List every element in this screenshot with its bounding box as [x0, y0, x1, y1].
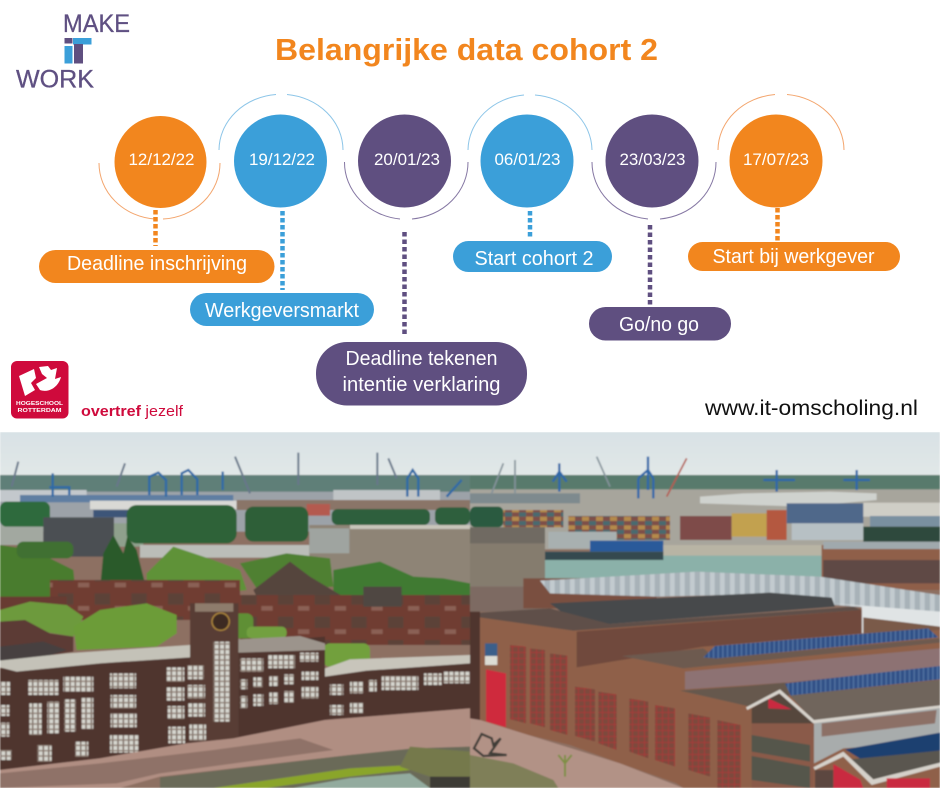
timeline item: 23/03/23: 23/03/23 — [620, 150, 686, 169]
sky — [0, 432, 940, 478]
callout: Start cohort 2 — [453, 241, 612, 272]
callout: Go/no go — [589, 307, 731, 340]
hall windows — [510, 645, 741, 788]
photo right half — [470, 457, 940, 788]
timeline item: 12/12/22: 12/12/22 — [128, 150, 194, 169]
callout: Werkgeversmarkt — [190, 293, 374, 326]
photo: aerial view of Rotterdam harbour and campus — [0, 432, 940, 788]
logo: Make IT Work: MAKE — [63, 10, 130, 38]
horizon and harbour — [0, 475, 470, 493]
website url: www.it-omscholing.nl — [704, 397, 918, 420]
photo left half — [0, 453, 470, 788]
front gable dark — [752, 692, 813, 737]
timeline item: 20/01/23: 20/01/23 — [374, 150, 440, 169]
plaza — [470, 718, 683, 788]
quay wall — [160, 747, 470, 788]
blue solar front — [785, 666, 940, 696]
timeline item: 19/12/22: 19/12/22 — [249, 150, 315, 169]
front trees — [0, 602, 83, 637]
title: Belangrijke data cohort 2 — [275, 32, 658, 67]
timeline item: 06/01/23 — [468, 95, 592, 237]
blue warehouse — [548, 532, 617, 548]
callout: Werkgeversmarkt: Werkgeversmarkt — [205, 300, 359, 322]
small tree — [558, 755, 572, 777]
low white buildings — [140, 545, 310, 558]
quay — [0, 708, 470, 788]
callout: Start bij werkgever — [688, 242, 900, 271]
parking — [470, 587, 545, 612]
sculpture — [474, 734, 507, 756]
cranes — [49, 470, 462, 497]
beige warehouse — [309, 525, 470, 585]
dark office — [43, 517, 114, 557]
red door — [486, 669, 506, 727]
white gable trim — [746, 689, 940, 723]
timeline item: 20/01/23 — [344, 114, 468, 336]
grey annex — [814, 707, 940, 763]
beige warehouse — [470, 542, 546, 586]
far trees — [0, 502, 50, 527]
pale roof — [833, 603, 940, 633]
dark sawtooth roof — [550, 593, 835, 624]
container stacks — [470, 507, 503, 527]
canal bank — [470, 755, 558, 788]
callout: Go/no go: Go/no go — [619, 314, 699, 336]
sign — [485, 643, 497, 656]
callout: Deadline tekenen intentie verklaring: Deadline tekenen — [346, 348, 498, 370]
timeline item: 19/12/22 — [219, 94, 343, 290]
windows — [0, 653, 470, 762]
quay and water — [545, 552, 822, 578]
callout: Start cohort 2: Start cohort 2 — [474, 248, 594, 270]
main hall walls — [480, 608, 940, 788]
timeline item: 23/03/23 — [592, 114, 716, 306]
logo: Hogeschool Rotterdam: ROTTERDAM — [18, 408, 62, 414]
timeline item: 17/07/23 — [718, 94, 844, 242]
house rows — [50, 580, 240, 620]
logo: Make IT Work: WORK — [16, 66, 94, 94]
middle green trees — [0, 545, 75, 600]
tagline: overtref jezelf: overtref jezelf — [81, 403, 184, 420]
logo: Make IT Work — [16, 10, 130, 94]
blue lower roof — [845, 733, 940, 761]
timeline item: 12/12/22 — [99, 116, 220, 246]
callout: Deadline inschrijving — [39, 250, 274, 283]
logo: Hogeschool Rotterdam: HOGESCHOOL — [16, 401, 64, 407]
cranes — [553, 457, 870, 498]
corrugated roof — [790, 680, 940, 721]
callout: Start bij werkgever: Start bij werkgever — [712, 246, 875, 268]
top right brick — [822, 545, 940, 590]
clock tower — [190, 603, 238, 740]
building mass — [0, 636, 471, 770]
callout: Deadline tekenen intentie verklaring: intentie verklaring — [342, 374, 500, 396]
horizon and harbour — [468, 474, 940, 490]
glazing band — [685, 648, 940, 689]
roof strips — [0, 645, 190, 672]
houses far left — [0, 619, 74, 655]
logo: Hogeschool Rotterdam — [11, 361, 68, 418]
middle hall roof — [622, 638, 940, 668]
solar roof hall — [523, 578, 657, 608]
callout: Deadline tekenen intentie verklaring — [316, 342, 527, 406]
callout: Deadline inschrijving: Deadline inschrijving — [67, 253, 247, 275]
gable lower wall — [752, 723, 813, 788]
timeline item: 17/07/23: 17/07/23 — [743, 150, 809, 169]
timeline item: 06/01/23: 06/01/23 — [494, 150, 560, 169]
small roof — [680, 683, 790, 707]
photo base — [0, 530, 940, 788]
